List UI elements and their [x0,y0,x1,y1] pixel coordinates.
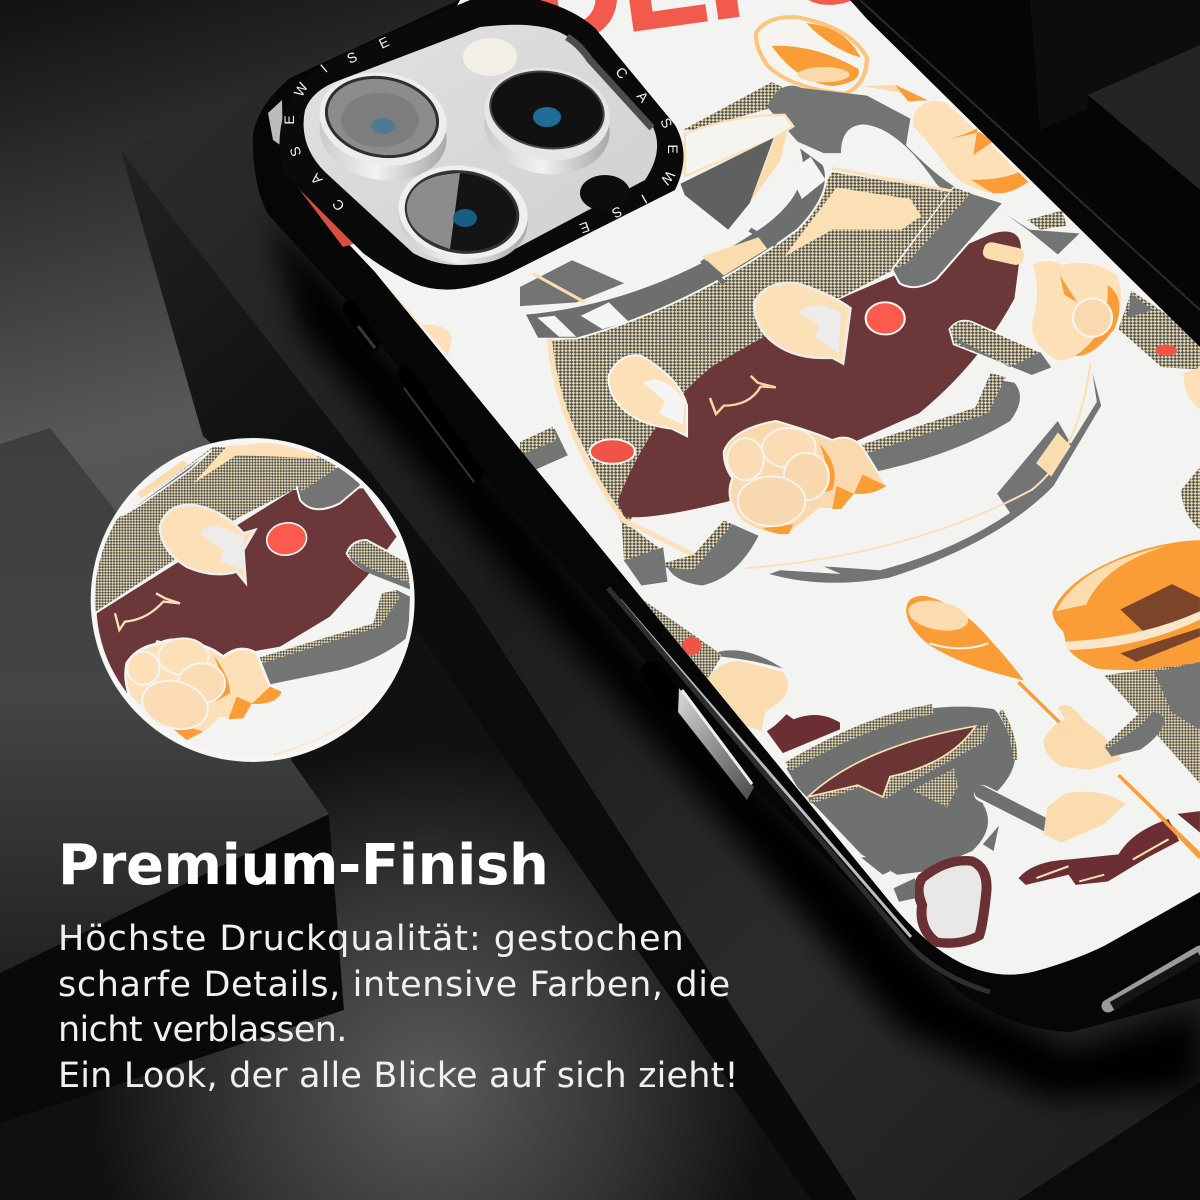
gray strap top right [1006,210,1079,254]
phone case artwork [350,0,1200,975]
ring lettering: E [376,33,392,52]
body text: Ein Look, der alle Blicke auf sich zieht! [58,1056,739,1096]
ring lettering: W [657,168,678,189]
camera lens top left [312,63,454,190]
right edge fragments [1119,291,1200,530]
white gap by handle [280,577,410,650]
body text: scharfe Details, intensive Farben, die [58,965,731,1005]
left stub handle [520,427,568,471]
top ladle [756,17,928,101]
hand top right [912,100,1028,194]
bowl feet [861,826,999,902]
jar body [1104,662,1200,783]
charging port [1108,952,1200,1006]
spoon [905,596,1065,728]
camera lens right [478,60,616,182]
ring lettering: C [612,64,631,82]
gray rim strip [122,450,212,516]
center fist [724,421,886,534]
dotted lid behind [683,82,785,130]
smile [710,376,776,414]
camera island [268,0,684,290]
bottom cream arc [273,710,367,755]
cream highlight [785,188,921,256]
smile [115,593,180,630]
ring lettering: I [317,61,330,76]
dotted backdrop [93,447,340,613]
ring lettering: A [307,170,325,188]
body text: Höchste Druckqualität: gestochen [58,919,685,959]
ring lettering: S [657,115,676,131]
maroon bean [618,232,1021,517]
ring lettering: E [578,219,592,237]
clear bumper band [268,100,357,247]
red dot [264,520,309,558]
phone shadow [268,214,1200,1100]
maroon ring [919,861,987,943]
ring lettering: S [344,48,360,67]
ring lettering: C [329,196,348,214]
ring lettering: S [286,145,304,159]
eye top [754,283,850,364]
small gray handle [1104,711,1165,756]
gray piece under camera [520,260,624,306]
eye bottom [609,355,687,436]
right gray handle [858,373,1020,473]
left step block [0,428,857,1200]
edge hand with cap [640,598,788,731]
ring lettering: W [290,79,311,99]
ring lettering: E [665,144,681,154]
island clear glass [304,25,657,265]
red dot top [866,302,905,334]
ring lettering: S [609,203,625,222]
bowl [786,707,1051,875]
gray arm [257,590,410,685]
ring lettering: I [639,191,650,207]
pot interior [685,115,793,176]
body text [58,919,739,1096]
right fist [1031,260,1122,362]
maroon bean [97,488,397,697]
cream top [193,440,320,483]
ring lettering: E [281,115,297,125]
body text: nicht verblassen. [58,1010,347,1050]
outer bowl lines [746,364,1101,583]
red dot bottom [590,439,635,464]
side buttons [350,308,754,800]
gray thumb [297,463,362,509]
illustration: lower objects [640,540,1200,943]
cream pot outline [549,339,693,555]
hand at bowl handle [1044,792,1126,843]
dotted handle [347,540,410,589]
pot lower dots [550,172,954,528]
gray arch handle [767,86,956,201]
lower gray handle [622,520,759,586]
island ring [279,0,684,290]
flash [463,38,517,76]
zoom detail circle [91,438,415,762]
ring lettering: A [634,88,652,106]
dotted arm by right fist [949,321,1051,375]
microphone hole [580,175,630,211]
small maroon blob [767,714,840,753]
jar lid [1052,540,1200,670]
orange drip line [1119,775,1200,854]
fist [126,638,282,740]
cream and orange fragment by camera [375,272,452,356]
eye [160,505,255,583]
phone body [253,0,1200,1032]
ring lettering [281,33,681,237]
maroon spill [1019,811,1200,885]
upper right gray handle [892,188,1004,287]
illustration: central pot [520,17,1200,586]
pot rim band [524,145,826,339]
camera lens bottom [392,157,534,273]
heading: Premium-Finish [58,833,548,898]
light beam on floor [291,600,811,1200]
small hand holding spoon [1044,705,1122,770]
right block [1088,45,1200,190]
